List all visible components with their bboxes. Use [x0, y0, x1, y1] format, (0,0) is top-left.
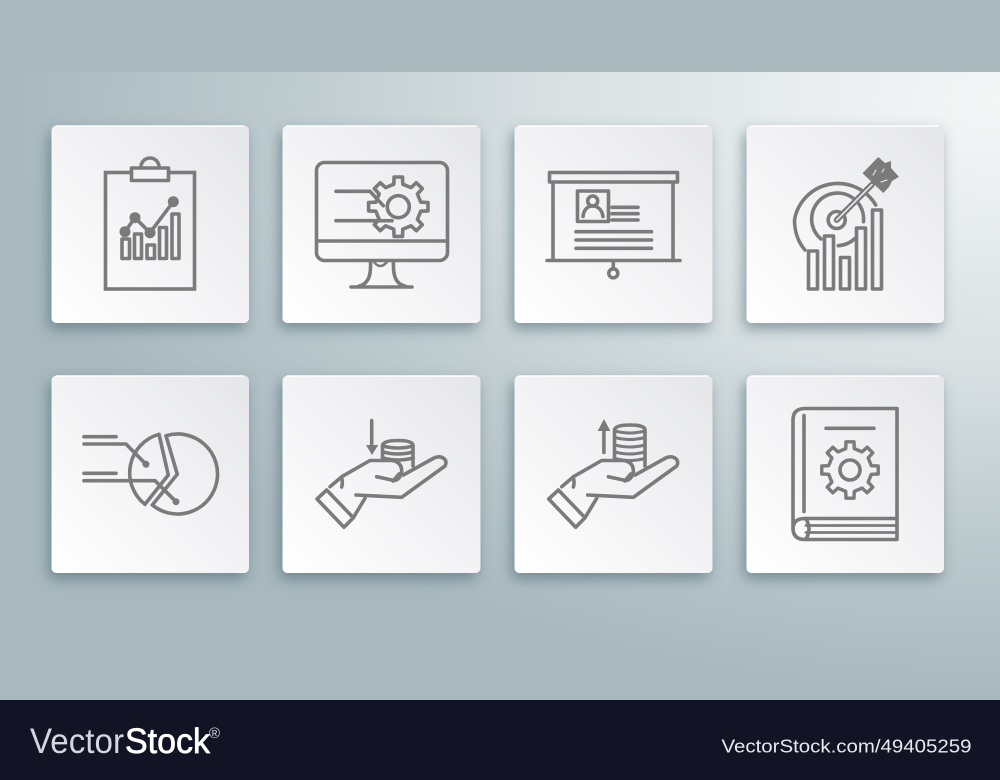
panel: pie chart — [52, 376, 249, 573]
icon: target and arrow — [794, 157, 899, 289]
footer logo: VectorStock: Vector — [30, 722, 124, 761]
icon: monitor gear — [316, 162, 448, 287]
background: top band — [0, 0, 1000, 72]
panel: hand with coins and up arrow — [514, 376, 712, 573]
icon: manual book — [793, 408, 897, 540]
footer logo: VectorStock — [30, 722, 220, 761]
panel: target with bar chart — [746, 126, 944, 323]
panel: hand with coins and down arrow — [282, 376, 480, 573]
icon: presentation screen with profile — [547, 172, 680, 278]
icon: split pie chart — [84, 434, 218, 514]
panel: monitor with gear — [282, 126, 480, 323]
icon: clipboard chart — [106, 158, 194, 289]
icon: hand, coins, down arrow — [317, 420, 446, 527]
footer logo: VectorStock: Stock — [125, 722, 210, 761]
footer logo: VectorStock: ® — [209, 725, 220, 742]
icon: hand, coins, up arrow — [549, 419, 678, 527]
footer bar — [0, 700, 1000, 780]
panel: clipboard with growth chart — [52, 126, 249, 323]
panel: book with gear — [746, 376, 944, 573]
footer image id: VectorStock.com/49405259 — [722, 736, 972, 756]
panel: presentation board — [514, 126, 712, 323]
